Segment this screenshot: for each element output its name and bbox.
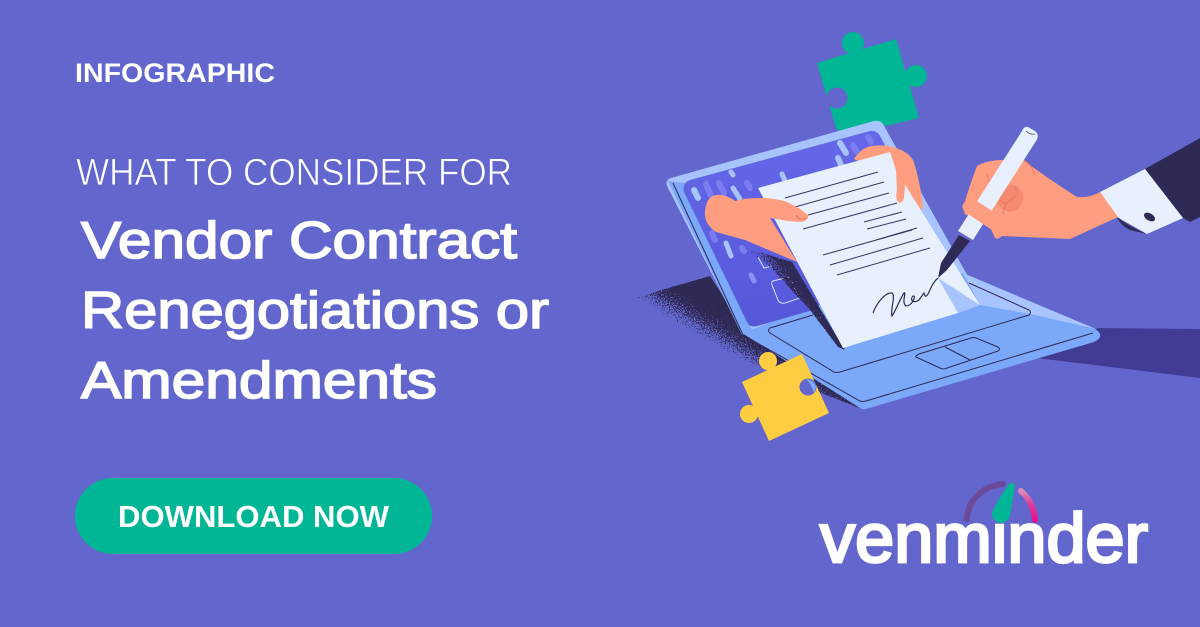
base highlight [963, 273, 1096, 329]
text lines [785, 172, 930, 275]
right finger over paper [890, 152, 910, 202]
writing hand [938, 127, 1200, 278]
palm circle [996, 184, 1024, 214]
keyboard and edge outlines [673, 183, 1093, 402]
thumb [963, 200, 1000, 230]
title: Amendments [81, 352, 437, 410]
shadow: right of laptop [1037, 328, 1200, 378]
title: Renegotiations or [81, 282, 549, 340]
laptop screen [684, 131, 925, 326]
laptop base [742, 273, 1100, 409]
lid side frame [668, 181, 752, 335]
screen outline boxes [758, 257, 800, 303]
suit sleeve [1145, 138, 1200, 222]
title: Vendor Contract [81, 212, 518, 270]
button: download now: DOWNLOAD NOW [118, 499, 390, 534]
cuff button [1143, 211, 1156, 223]
upper hand behind paper [854, 145, 923, 220]
button: download now [75, 478, 432, 554]
subtitle: WHAT TO CONSIDER FOR [76, 152, 512, 194]
paper fold [938, 278, 980, 313]
hand crease [987, 160, 1035, 185]
eyebrow label: INFOGRAPHIC [75, 58, 275, 88]
document paper [758, 152, 980, 348]
left hand holding paper [705, 195, 808, 262]
icon: green puzzle piece [817, 32, 927, 136]
shadow: left of laptop [637, 276, 862, 409]
title [81, 212, 549, 410]
signature [873, 278, 938, 316]
under cuff shadow [1117, 217, 1147, 234]
gauge right arc [1021, 491, 1035, 520]
gauge left arc [967, 484, 1003, 519]
logo: venminder: venminder [820, 499, 1148, 577]
gauge needle [992, 483, 1015, 523]
illustration: laptop [666, 121, 1100, 409]
icon: yellow puzzle piece [740, 352, 829, 441]
screen code dashes [694, 137, 871, 281]
laptop lid [666, 121, 970, 333]
shirt cuff [1100, 169, 1183, 234]
hand [963, 160, 1118, 239]
paper shadow on screen [743, 247, 845, 350]
pen [938, 127, 1038, 278]
